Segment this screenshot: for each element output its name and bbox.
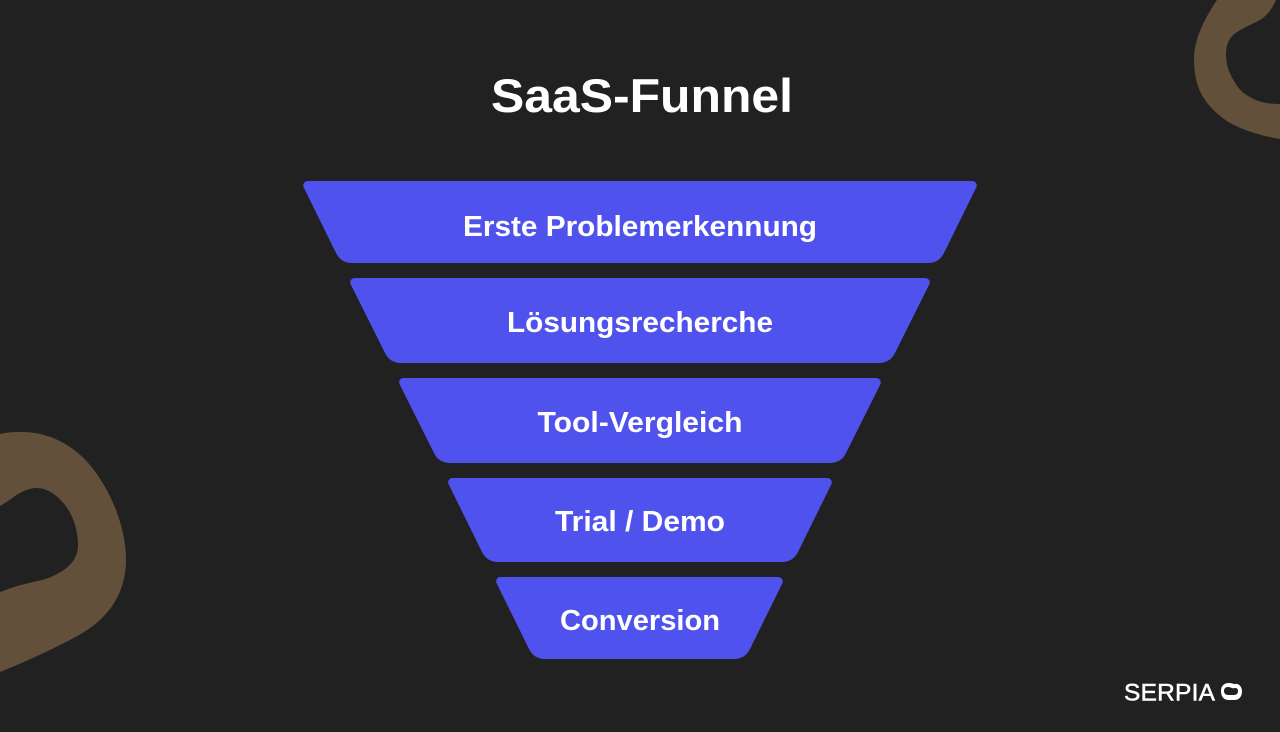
logo: SERPIA: SERPIA [1124,680,1216,706]
funnel stage 4 [448,478,832,562]
funnel stage 4: Trial / Demo [555,506,725,538]
funnel stage 3: Tool-Vergleich [538,407,742,439]
title: SaaS-Funnel [491,69,793,122]
icon: logo mark [1221,683,1242,700]
funnel stage 5: Conversion [560,605,720,637]
funnel stage 2 [350,278,930,363]
decorative blob: top right [1194,0,1280,139]
funnel stage 2: Lösungsrecherche [507,307,773,339]
funnel [303,181,977,659]
funnel stage 1: Erste Problemerkennung [463,211,817,243]
funnel stage 5 [496,577,783,659]
funnel stage 1 [303,181,977,263]
funnel stage 3 [399,378,881,463]
decorative blob: bottom left [0,432,126,672]
